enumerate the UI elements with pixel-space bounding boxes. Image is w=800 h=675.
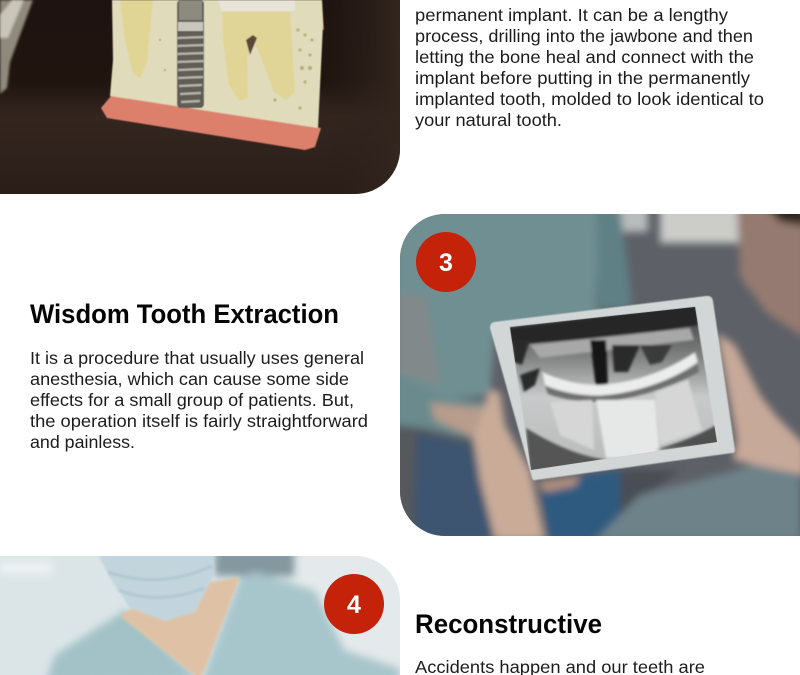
photo: dental surgeon in scrubs: [0, 550, 405, 675]
badge: number 4: [324, 574, 384, 634]
badge: number 3: [416, 232, 476, 292]
text block: wisdom tooth description: [30, 348, 368, 452]
photo: dental implant model: [0, 0, 400, 194]
text block: wisdom tooth description: It is a procedure that usually uses general: [30, 348, 364, 368]
x-ray teeth: [508, 305, 720, 472]
heading: wisdom tooth extraction: Wisdom Tooth Extraction: [30, 299, 339, 329]
bone pores: [159, 28, 314, 110]
text block: implant description: letting the bone heal and connect with the: [415, 47, 754, 67]
badge: number 3: 3: [439, 249, 453, 277]
text block: implant description: your natural tooth.: [415, 110, 562, 130]
text block: wisdom tooth description: and painless.: [30, 432, 135, 452]
text block: wisdom tooth description: effects for a small group of patients. But,: [30, 390, 354, 410]
heading: reconstructive: Reconstructive: [415, 609, 602, 639]
text block: wisdom tooth description: the operation itself is fairly straightforward: [30, 411, 368, 431]
tablet: [490, 296, 735, 480]
text block: implant description: [415, 5, 764, 130]
text block: implant description: implanted tooth, molded to look identical to: [415, 89, 764, 109]
neck: [120, 577, 240, 675]
badge: number 4: 4: [347, 591, 361, 619]
text block: implant description: permanent implant. It can be a lengthy: [415, 5, 728, 25]
photo: dental x-ray on tablet: [395, 205, 800, 540]
surgical mask: [97, 552, 214, 621]
text block: implant description: implant before putting in the permanently: [415, 68, 750, 88]
text block: implant description: process, drilling into the jawbone and then: [415, 26, 753, 46]
text block: wisdom tooth description: anesthesia, which can cause some side: [30, 369, 349, 389]
implant thread stripes: [177, 37, 204, 102]
